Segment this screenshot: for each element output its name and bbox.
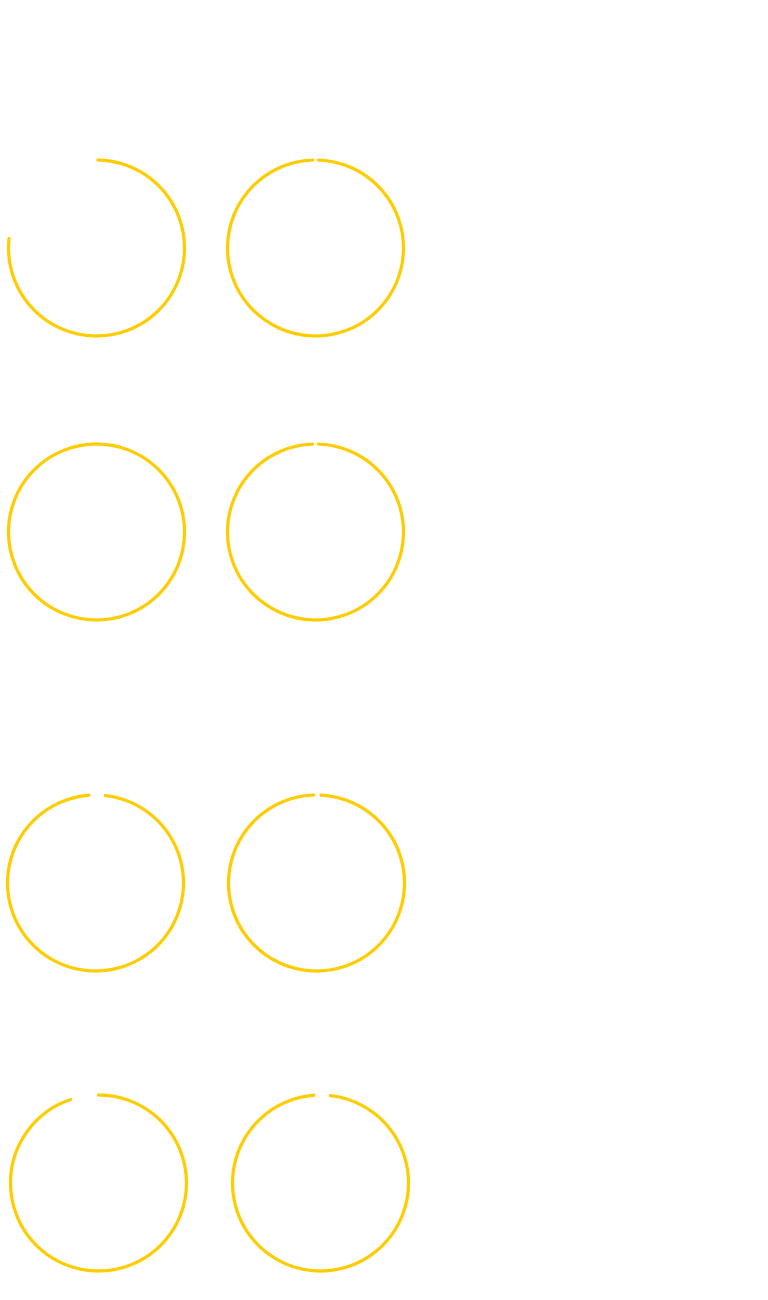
ring 7: gap at upper left [10, 1095, 186, 1271]
ring 5: gap at top [0, 786, 193, 980]
ring 2: small gap at top [224, 157, 407, 339]
ring 6: small gap at top [224, 791, 409, 975]
ring 8: gap at top [223, 1086, 418, 1280]
ring 4: small gap at top [224, 441, 407, 623]
ring 1: partial arc [7, 158, 186, 338]
rings group [0, 157, 418, 1280]
ring 3: full circle [8, 444, 184, 620]
